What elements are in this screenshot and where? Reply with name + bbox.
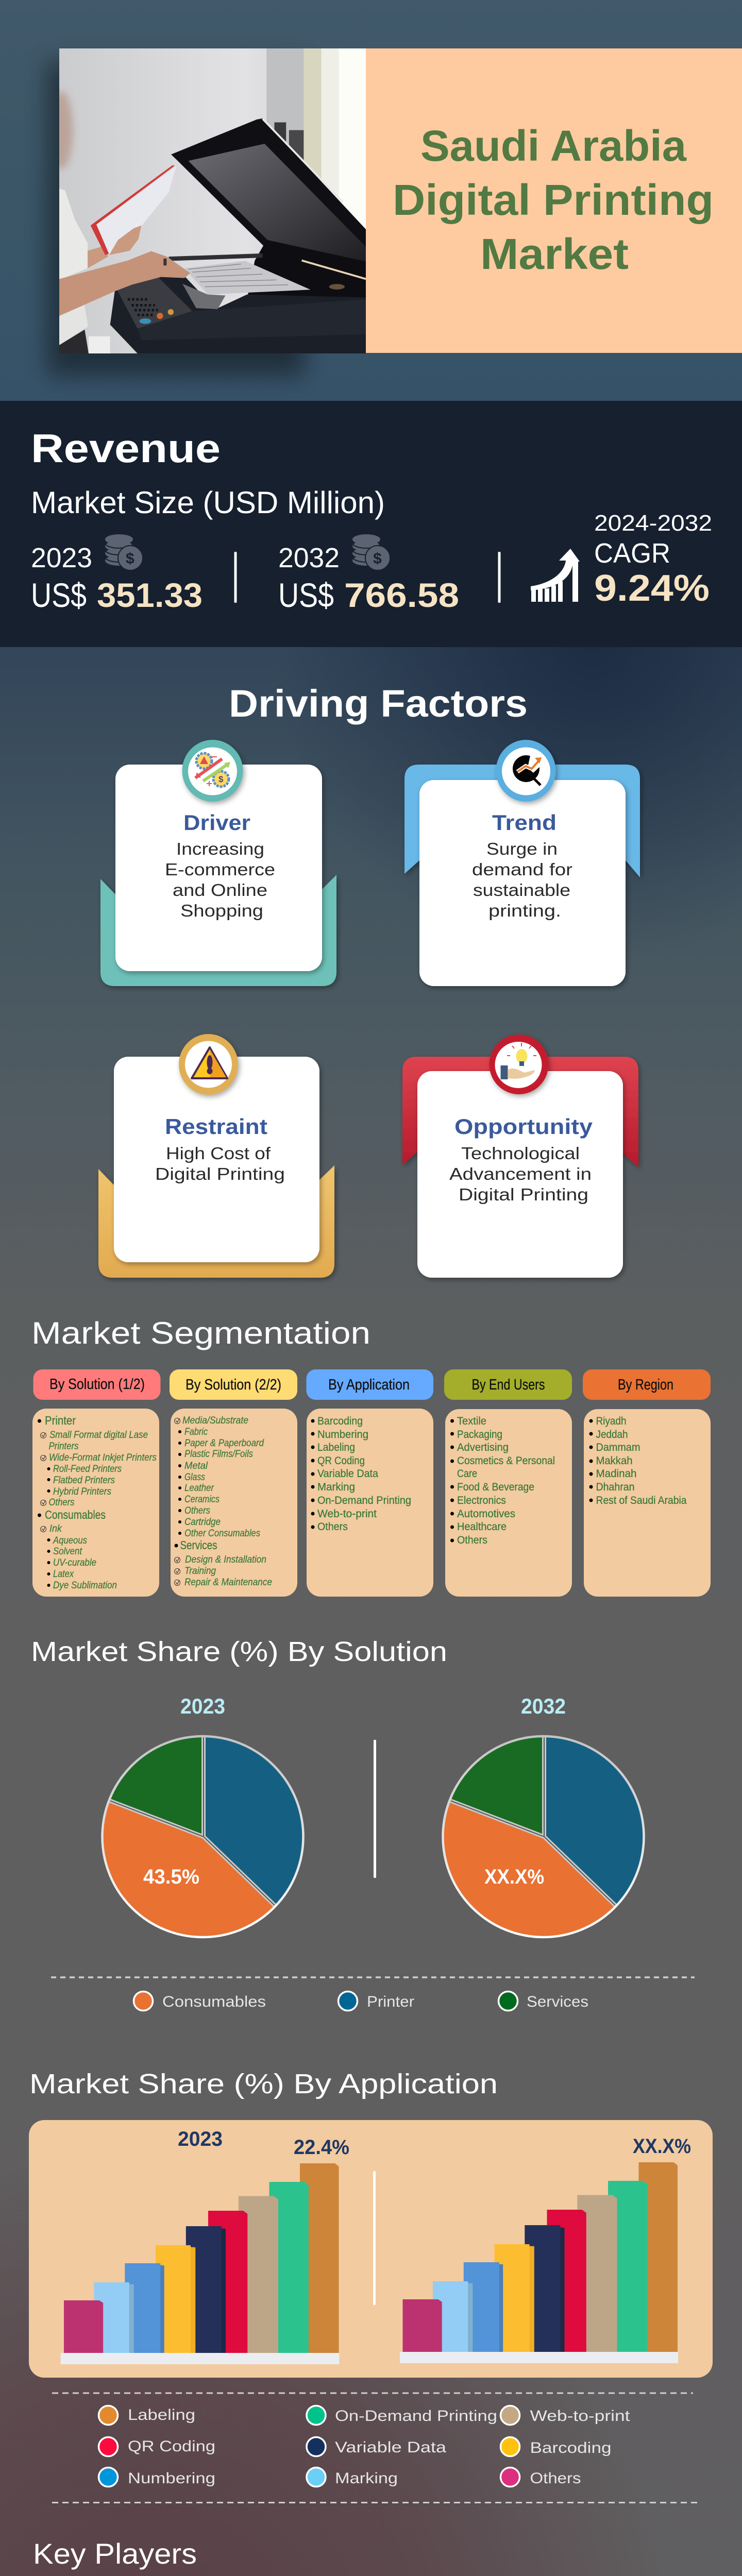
list: media, services: Leather: [184, 1483, 214, 1494]
trend text: sustainable: [473, 880, 570, 900]
opportunity text: Digital Printing: [459, 1185, 588, 1204]
list: regions: Madinah: [596, 1468, 637, 1480]
legend: application: [99, 2406, 630, 2487]
card: restraint: [98, 1034, 334, 1278]
list: applications: Labeling: [317, 1442, 355, 1453]
list: end users: Care: [457, 1468, 477, 1480]
segmentation column: by application: [306, 1369, 433, 1597]
list: media, services: Metal: [184, 1461, 208, 1471]
legend: application: QR Coding: [128, 2438, 215, 2455]
2023 value: 351.33: [97, 576, 203, 614]
driver text: [165, 839, 275, 920]
driver text: E-commerce: [165, 860, 275, 879]
list: end users: [450, 1415, 555, 1546]
photo shadow: [47, 62, 305, 376]
2032 value: [278, 534, 459, 614]
market segmentation heading: Market Segmentation: [31, 1316, 370, 1350]
icon: growth arrow: [531, 549, 580, 602]
list: media, services: Ceramics: [184, 1494, 220, 1505]
restraint text: [155, 1144, 285, 1183]
segmentation column: by region: By Region: [618, 1377, 673, 1393]
year label 2023: 2023: [178, 2128, 223, 2150]
value label 22.4%: 22.4%: [294, 2136, 349, 2159]
list: printer and consumables: Ink: [49, 1523, 62, 1534]
segmentation column: by solution 2: [170, 1369, 297, 1597]
list: end users: Electronics: [457, 1495, 506, 1506]
trend heading: Trend: [492, 810, 556, 835]
icon: driver badge: $: [218, 774, 224, 784]
list: applications: [311, 1415, 411, 1533]
list: media, services: Glass: [184, 1472, 205, 1483]
list: regions: Riyadh: [596, 1415, 627, 1427]
list: printer and consumables: [38, 1414, 157, 1591]
legend: application: Web-to-print: [530, 2408, 630, 2425]
pie chart 2023: [102, 1736, 304, 1937]
hero banner: [47, 48, 742, 376]
restraint text: High Cost of: [166, 1144, 271, 1163]
driving factors heading: Driving Factors: [229, 682, 528, 725]
2023 value: 2023: [31, 543, 92, 573]
CAGR block: CAGR: [594, 538, 670, 569]
legend: application: Others: [530, 2470, 581, 2487]
pie label 43.5%: 43.5%: [143, 1866, 199, 1888]
list: media, services: Fabric: [184, 1427, 208, 1437]
title: Market: [480, 230, 629, 278]
list: media, services: Paper & Paperboard: [184, 1438, 264, 1449]
legend: application: Barcoding: [530, 2439, 611, 2456]
segmentation column: by application: By Application: [328, 1377, 410, 1393]
list: media, services: Cartridge: [184, 1517, 221, 1528]
2032 value: US$: [278, 576, 334, 614]
segmentation column: by solution 2: By Solution (2/2): [185, 1377, 281, 1393]
legend: solution: [134, 1992, 588, 2010]
legend: application: On-Demand Printing: [335, 2408, 497, 2425]
legend: application: Labeling: [128, 2406, 195, 2424]
pie chart 2032: [443, 1736, 645, 1937]
2023 value: [31, 534, 203, 614]
list: printer and consumables: Small Format digital Lase: [49, 1430, 148, 1440]
list: regions: Rest of Saudi Arabia: [596, 1495, 687, 1506]
icon: coins 2023: $: [126, 550, 134, 567]
CAGR block: 2024-2032: [594, 511, 712, 536]
bar chart 2032: [400, 2162, 678, 2363]
list: applications: Others: [317, 1521, 348, 1533]
list: printer and consumables: Solvent: [53, 1546, 82, 1557]
list: regions: Dhahran: [596, 1481, 635, 1493]
list: printer and consumables: UV-curable: [53, 1557, 96, 1568]
list: media, services: Others: [184, 1505, 210, 1516]
year label 2032: 2032: [521, 1694, 566, 1718]
list: printer and consumables: Roll-Feed Printers: [53, 1464, 122, 1475]
list: media, services: Services: [180, 1538, 217, 1552]
title: Saudi Arabia: [420, 122, 687, 170]
year label 2023: 2023: [180, 1694, 225, 1718]
restraint heading: Restraint: [165, 1114, 267, 1139]
key players heading: Key Players: [33, 2537, 197, 2570]
revenue heading: Revenue: [31, 426, 221, 471]
legend: solution: Printer: [367, 1993, 414, 2010]
card: trend: [404, 740, 640, 986]
list: printer and consumables: Flatbed Printers: [53, 1475, 115, 1486]
market share by solution heading: Market Share (%) By Solution: [31, 1636, 447, 1667]
segmentation column: by solution 1: [32, 1369, 161, 1597]
legend: application: Numbering: [128, 2470, 215, 2487]
icon: coins 2032: [352, 534, 390, 570]
card: driver: [100, 740, 336, 986]
list: media, services: [174, 1415, 272, 1588]
list: media, services: Plastic Films/Foils: [184, 1449, 253, 1460]
list: end users: Others: [457, 1534, 487, 1546]
list: media, services: Training: [184, 1566, 216, 1577]
trend text: Surge in: [486, 839, 558, 858]
segmentation column: by solution 1: By Solution (1/2): [49, 1376, 145, 1393]
list: printer and consumables: Dye Sublimation: [53, 1580, 117, 1591]
revenue panel: [0, 401, 742, 647]
opportunity heading: Opportunity: [454, 1114, 593, 1139]
legend: solution: Consumables: [162, 1993, 266, 2010]
2032 value: 766.58: [344, 576, 459, 614]
restraint text: Digital Printing: [155, 1164, 285, 1183]
segmentation column: by region: [583, 1369, 711, 1597]
legend: application: Marking: [335, 2470, 398, 2487]
segmentation column: by end users: By End Users: [472, 1377, 545, 1393]
title: [393, 122, 714, 278]
title: Digital Printing: [393, 176, 714, 224]
opportunity text: [449, 1144, 592, 1204]
list: regions: [589, 1415, 687, 1506]
title panel: [366, 48, 742, 353]
driver text: Increasing: [176, 839, 264, 858]
list: media, services: Repair & Maintenance: [184, 1577, 272, 1588]
opportunity text: Technological: [461, 1144, 580, 1163]
list: applications: Barcoding: [317, 1415, 363, 1427]
segmentation column: by end users: [444, 1369, 572, 1597]
list: applications: Numbering: [317, 1429, 368, 1440]
list: applications: Marking: [317, 1481, 355, 1493]
list: end users: Healthcare: [457, 1521, 507, 1533]
list: regions: Dammam: [596, 1442, 640, 1453]
list: applications: Web-to-print: [317, 1508, 377, 1520]
hero photo: person using a copier: [49, 48, 366, 353]
value label XX.X%: XX.X%: [633, 2135, 691, 2158]
list: applications: Variable Data: [317, 1468, 378, 1480]
list: regions: Jeddah: [596, 1429, 628, 1440]
list: applications: On-Demand Printing: [317, 1495, 411, 1506]
list: end users: Cosmetics & Personal: [457, 1455, 555, 1467]
driver heading: Driver: [183, 810, 250, 835]
panel: application charts: [29, 2120, 713, 2378]
list: printer and consumables: Printer: [45, 1414, 76, 1427]
list: printer and consumables: Others: [48, 1497, 75, 1508]
bar chart 2023: [61, 2163, 339, 2364]
market size label: Market Size (USD Million): [31, 485, 385, 520]
list: printer and consumables: Printers: [48, 1441, 79, 1452]
driver text: Shopping: [180, 901, 263, 920]
CAGR block: 9.24%: [594, 568, 710, 609]
market share by application heading: Market Share (%) By Application: [29, 2069, 498, 2099]
icon: driver badge: [182, 740, 243, 802]
list: end users: Packaging: [457, 1429, 502, 1440]
CAGR block: [594, 511, 712, 609]
list: end users: Advertising: [457, 1442, 509, 1453]
list: media, services: Media/Substrate: [182, 1415, 248, 1426]
list: printer and consumables: Hybrid Printers: [53, 1486, 111, 1497]
2032 value: 2032: [278, 543, 340, 573]
list: printer and consumables: Wide-Format Inkjet Printers: [49, 1452, 157, 1463]
list: printer and consumables: Aqueous: [53, 1535, 87, 1546]
trend text: [472, 839, 572, 920]
list: media, services: Design & Installation: [185, 1554, 266, 1565]
opportunity text: Advancement in: [449, 1164, 592, 1183]
card: opportunity: [402, 1035, 638, 1278]
list: printer and consumables: Latex: [53, 1569, 74, 1580]
list: media, services: Other Consumables: [184, 1528, 260, 1539]
2023 value: US$: [31, 576, 87, 614]
legend: solution: Services: [527, 1993, 588, 2010]
icon: coins 2032: $: [373, 550, 382, 567]
list: end users: Automotives: [457, 1508, 515, 1520]
list: regions: Makkah: [596, 1455, 633, 1467]
list: printer and consumables: Consumables: [45, 1508, 106, 1521]
trend text: printing.: [488, 901, 561, 920]
legend: application: Variable Data: [335, 2439, 446, 2456]
icon: trend badge: [496, 740, 555, 802]
icon: warning badge: [179, 1034, 238, 1095]
driver text: and Online: [173, 880, 267, 900]
divider between pies: [374, 1740, 376, 1878]
list: end users: Food & Beverage: [457, 1481, 534, 1493]
icon: opportunity badge: [490, 1035, 548, 1094]
pie label XX.X%: XX.X%: [484, 1866, 544, 1888]
list: applications: QR Coding: [317, 1455, 365, 1467]
icon: coins 2023: [105, 534, 143, 570]
list: end users: Textile: [457, 1415, 486, 1427]
trend text: demand for: [472, 860, 572, 879]
